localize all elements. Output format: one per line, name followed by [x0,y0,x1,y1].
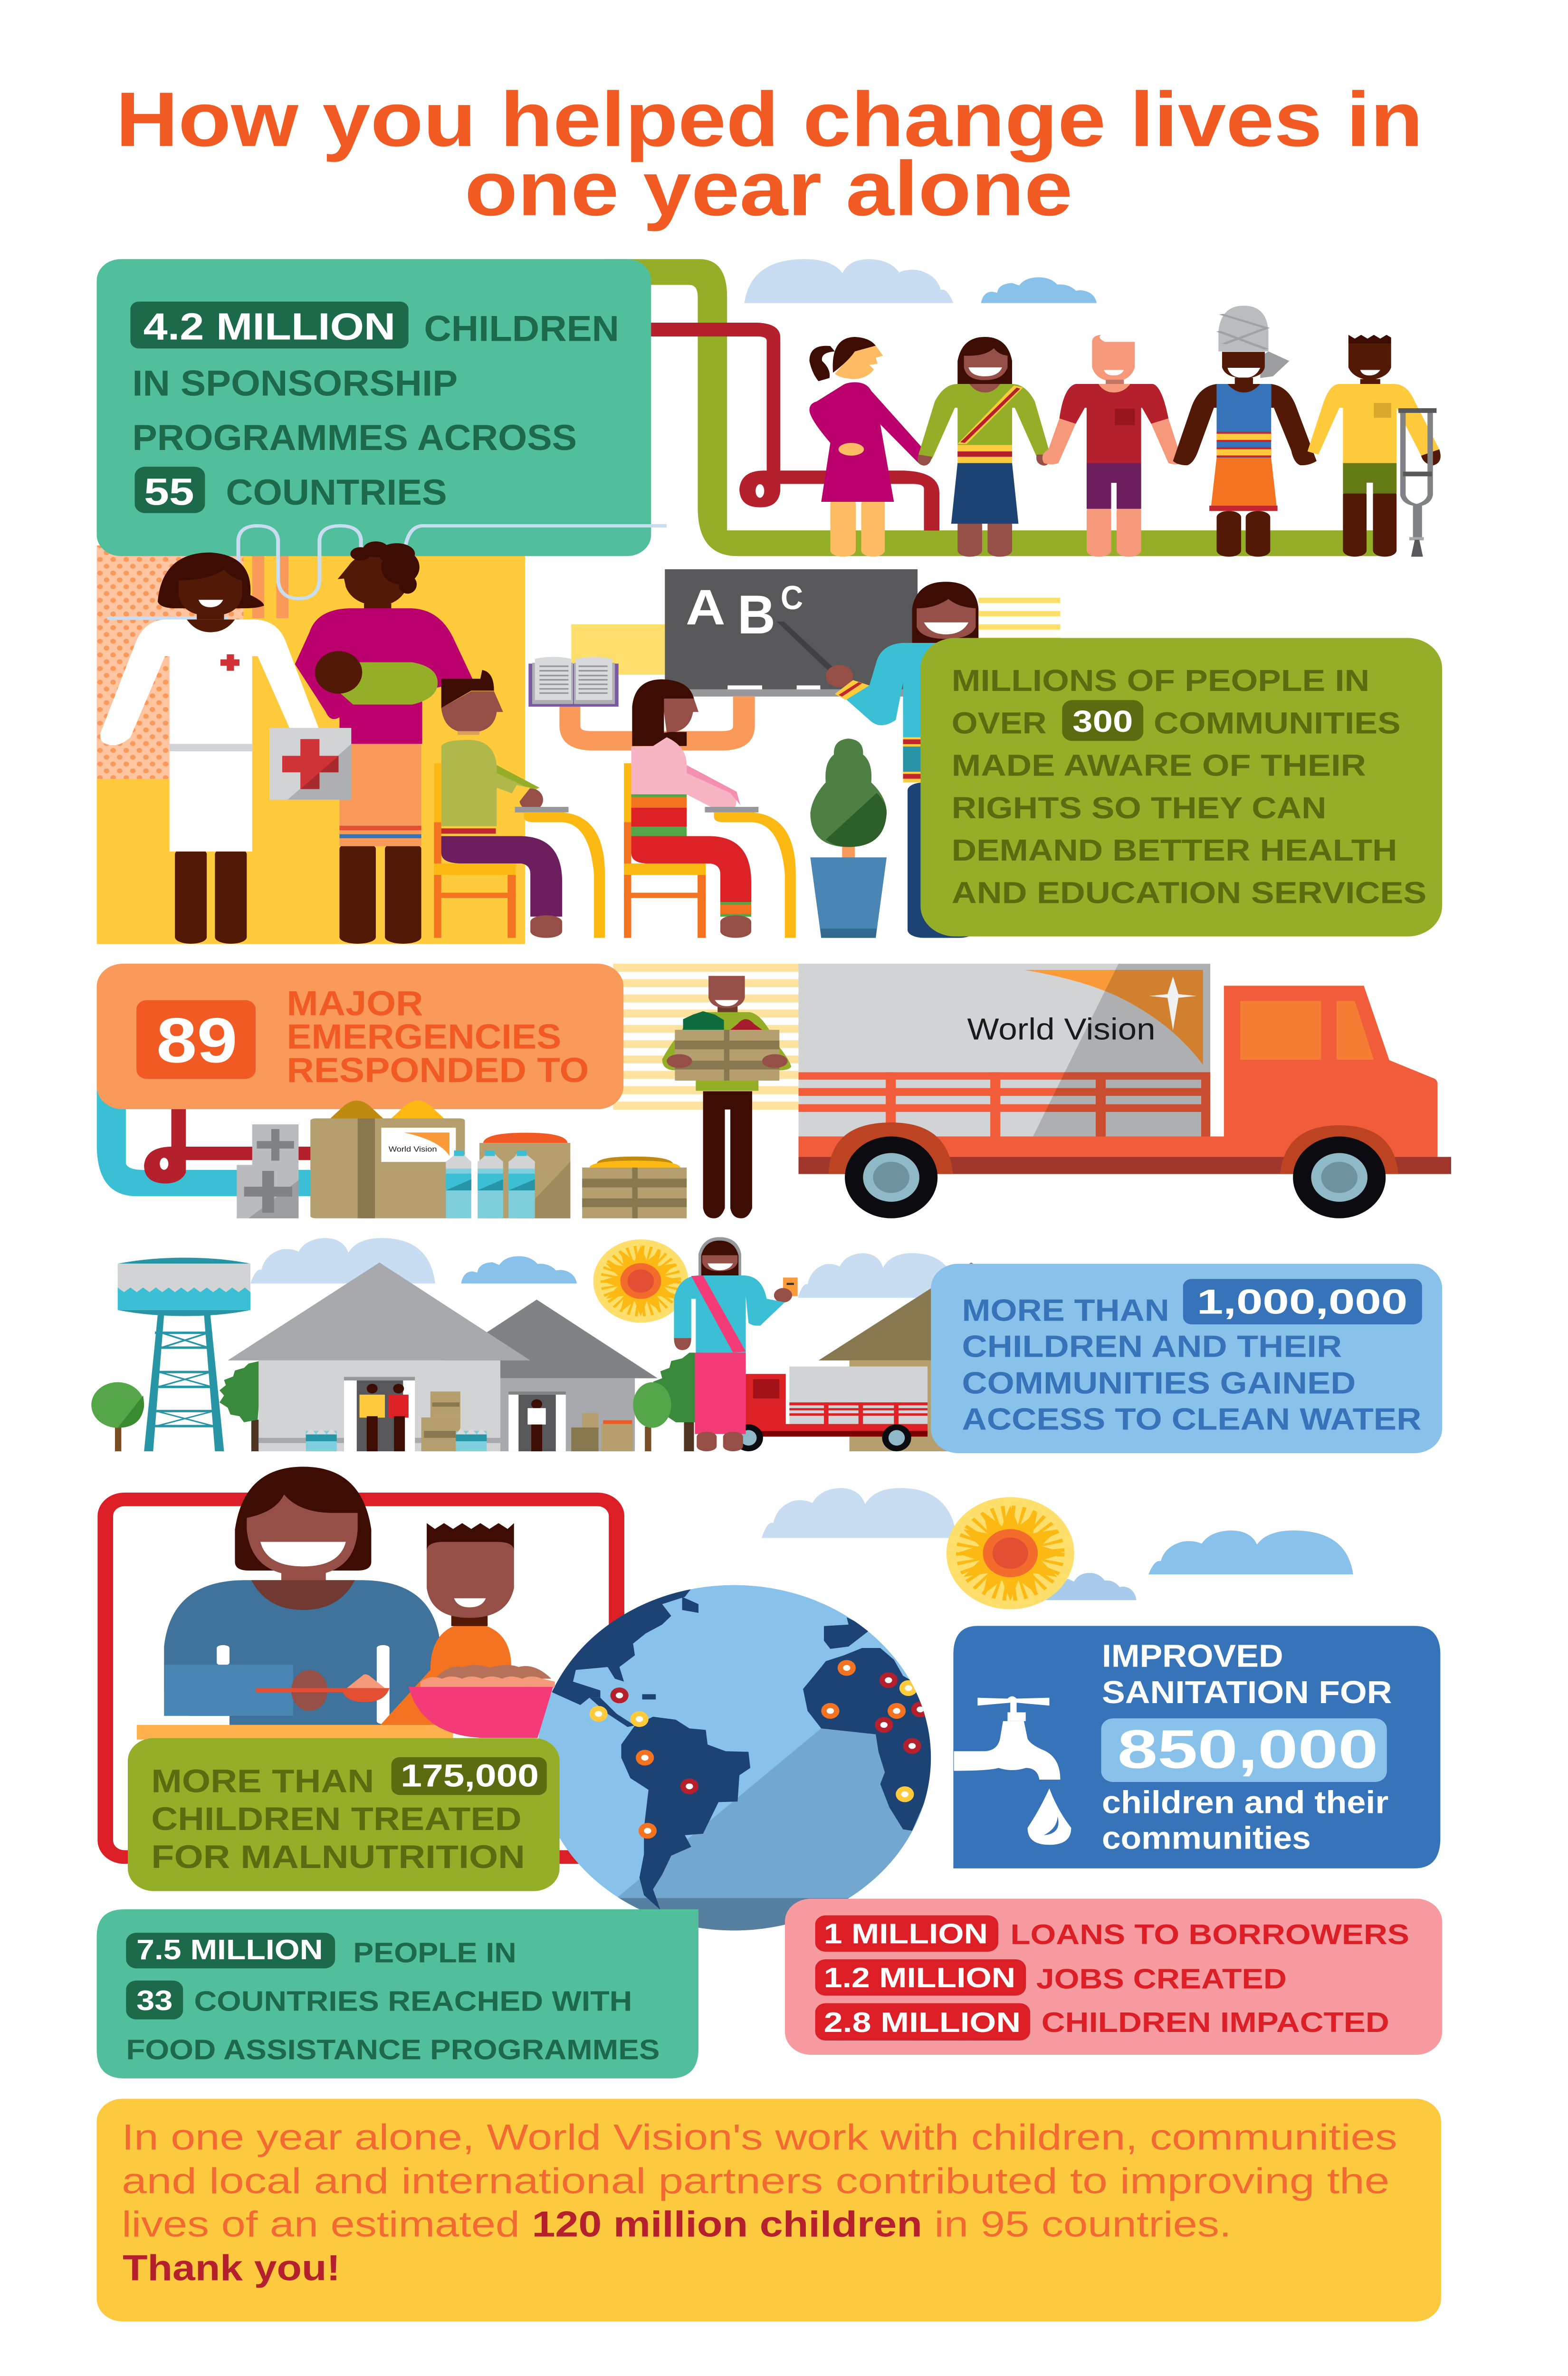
person: girl with head bandage [1173,306,1317,557]
pipe: olive pipe [604,259,1388,556]
person: teacher [777,582,989,938]
panel: food assistance [97,1909,698,2079]
icon: potted plant [810,738,887,938]
person: woman in magenta [809,337,930,557]
panel: yellow backdrop [97,546,525,944]
panel: sponsorship [97,259,651,556]
cargo [798,964,1210,1136]
text lines [952,664,1426,910]
text lines [962,1293,1421,1437]
text: improved sanitation for: IMPROVED [1102,1638,1283,1674]
chip: 1,000,000 [1183,1279,1422,1324]
stripes [252,546,288,618]
icon: water tower [118,1258,250,1451]
chip: 300 [1062,700,1143,741]
panel: rights awareness [920,638,1442,937]
chip: 850,000: 850,000 [1118,1719,1378,1780]
text lines: OVER [952,706,1047,740]
chip: 4.2 million: 4.2 MILLION [143,306,395,348]
text: World Vision sack logo: World Vision [389,1145,437,1153]
icon: trees right [633,1353,703,1451]
icon: grain sack [310,1101,465,1218]
pipe loop gap [160,1158,168,1170]
chip: 55 [135,467,205,513]
body text [122,2117,1397,2244]
chalk letters ABC: B [737,584,775,645]
icon: cloud light [745,259,953,303]
pale square [571,624,665,675]
house: back grey [417,1300,658,1451]
continents [552,1589,931,1909]
illustration: five people holding hands [809,306,1441,557]
text: World Vision truck logo: World Vision [967,1013,1156,1046]
blackboard [665,569,918,697]
icon: cloud light left [250,1238,435,1284]
text: children and their communities: communities [1102,1820,1311,1856]
icon: sun [593,1239,688,1322]
body text: In one year alone, World Vision's work with children, communities [122,2117,1397,2157]
truck [798,964,1451,1218]
panel: sanitation [953,1626,1440,1868]
illustration: mother feeding boy [137,1466,514,1740]
icon: cloud blue [461,1256,577,1284]
chalk letters ABC: A [686,579,726,635]
panel: thank you [97,2098,1441,2321]
text: people in: PEOPLE IN [353,1937,516,1969]
chip: 55: 55 [144,471,194,513]
body text: lives of an estimated [122,2204,520,2244]
mat [137,1725,453,1740]
globe base [538,1585,928,1898]
panel: loans and jobs [785,1899,1442,2055]
house: right tan [819,1263,1126,1451]
chip: 1.2 million: 1.2 MILLION [824,1963,1015,1993]
icon: box with pile [479,1133,570,1218]
text lines [151,1763,525,1875]
text: improved sanitation for: SANITATION FOR [1102,1675,1392,1710]
text: countries: COUNTRIES [226,472,447,513]
illustration: relief supplies and truck [237,964,1451,1218]
truck: small red truck [734,1367,927,1451]
text lines: COMMUNITIES GAINED [962,1366,1356,1400]
text lines: FOR MALNUTRITION [151,1838,525,1875]
panel: malnutrition [128,1738,560,1891]
pale stripes behind crate carrier [613,964,800,1110]
chip: 89 [136,1000,256,1079]
icon: gray boxes [237,1124,298,1218]
body text: in 95 countries. [934,2204,1232,2244]
text: in sponsorship: IN SPONSORSHIP [132,363,458,403]
icon: first aid kit [269,728,351,800]
text: food assistance programmes: FOOD ASSISTANCE PROGRAMMES [126,2034,660,2066]
text: programmes across: PROGRAMMES ACROSS [132,418,577,458]
icon: cloud blue [981,278,1097,303]
body text: 120 million children [532,2204,922,2244]
person: seated child one [434,670,605,938]
chip: 1 million: 1 MILLION [824,1918,988,1950]
icon: boxes [421,1391,633,1451]
text lines: MORE THAN [151,1763,374,1799]
illustration: nurse, mother, pupils, teacher [100,541,1060,944]
house: front grey [228,1263,530,1451]
chip: 7.5 million: 7.5 MILLION [136,1935,323,1965]
chip: 33: 33 [136,1985,172,2016]
frame: red frame [105,1499,617,1857]
pipe: red pipe [617,323,939,530]
icon: cloud light right [798,1253,958,1298]
sleeve and spoon [164,1665,390,1716]
text: jobs: JOBS CREATED [1036,1964,1287,1994]
person: nurse [100,553,318,944]
text: children impacted: CHILDREN IMPACTED [1042,2007,1389,2038]
chip: 175,000: 175,000 [401,1758,539,1793]
text: children and their communities: children and their [1102,1785,1388,1820]
icon: cloud light [762,1488,957,1538]
text: children: CHILDREN [424,308,619,349]
title: one year alone [465,145,1072,231]
person: mother with baby [295,541,473,944]
pipe: red [144,1108,315,1184]
icon: dark tree behind house [220,1360,262,1451]
person: woman in green [918,337,1051,557]
text lines: MADE AWARE OF THEIR [952,749,1366,783]
title: How you helped change lives in [116,76,1423,163]
text lines: MORE THAN [962,1293,1169,1327]
panel: emergencies [97,964,623,1109]
pale yellow stripes [978,598,1060,643]
icon: cloud blue large [1148,1531,1353,1574]
icon: tree left [91,1382,144,1451]
icon: cloud small [1043,1573,1137,1600]
icon: tap and drop [954,1696,1071,1845]
person: boy with crutch [1308,335,1441,557]
cab [798,986,1437,1157]
text: countries reached with: COUNTRIES REACHED WITH [194,1986,632,2017]
chip: 89: 89 [156,1005,238,1076]
text lines: RESPONDED TO [287,1051,589,1090]
text lines: COMMUNITIES [1154,706,1401,740]
text lines: EMERGENCIES [287,1017,561,1056]
panel: clean water [931,1264,1442,1453]
icon: bottles [306,1428,487,1451]
chip: 1,000,000: 1,000,000 [1197,1282,1407,1322]
text lines: AND EDUCATION SERVICES [952,876,1426,910]
person: man carrying crate [662,976,791,1218]
person: arms holding book [528,657,755,750]
text: loans: LOANS TO BORROWERS [1010,1919,1409,1950]
text lines: ACCESS TO CLEAN WATER [962,1402,1421,1437]
chip: 33 [126,1981,183,2020]
map pins [590,1660,929,1839]
chalk letters ABC [686,579,803,645]
text lines: CHILDREN AND THEIR [962,1329,1342,1364]
text: thank you: Thank you! [123,2248,340,2288]
wheels [845,1136,937,1218]
text lines: CHILDREN TREATED [151,1800,522,1837]
person: woman on phone [674,1237,798,1451]
body text: and local and international partners contributed to improving the [122,2161,1389,2202]
illustration: emergency pipes [97,1085,315,1196]
text lines: MILLIONS OF PEOPLE IN [952,664,1369,698]
chalk letters ABC: C [781,579,803,616]
chip: 300: 300 [1072,705,1133,738]
pipe: teal [97,1085,315,1196]
text lines: MAJOR [287,984,423,1023]
text lines: DEMAND BETTER HEALTH [952,834,1397,867]
text: improved sanitation for [1102,1638,1392,1710]
person: boy in red shirt [1042,335,1183,557]
text: children and their communities [1102,1785,1388,1856]
stethoscope tube [107,526,667,618]
person: seated child two [624,679,796,938]
icon: water bottles [446,1150,535,1218]
icon: bowl of food [409,1665,555,1738]
icon: sun large [947,1497,1074,1609]
icon: crate of corn [582,1157,687,1218]
person: mother [164,1466,440,1725]
illustration: village [91,1237,1126,1451]
pipe loop gap [755,484,764,498]
title [116,76,1423,231]
text lines: RIGHTS SO THEY CAN [952,791,1326,825]
illustration: globe [538,1585,931,1930]
person: boy [381,1523,514,1725]
panel: dotted backdrop [97,546,244,779]
chip: 2.8 million: 2.8 MILLION [824,2007,1021,2038]
text lines [287,984,589,1090]
